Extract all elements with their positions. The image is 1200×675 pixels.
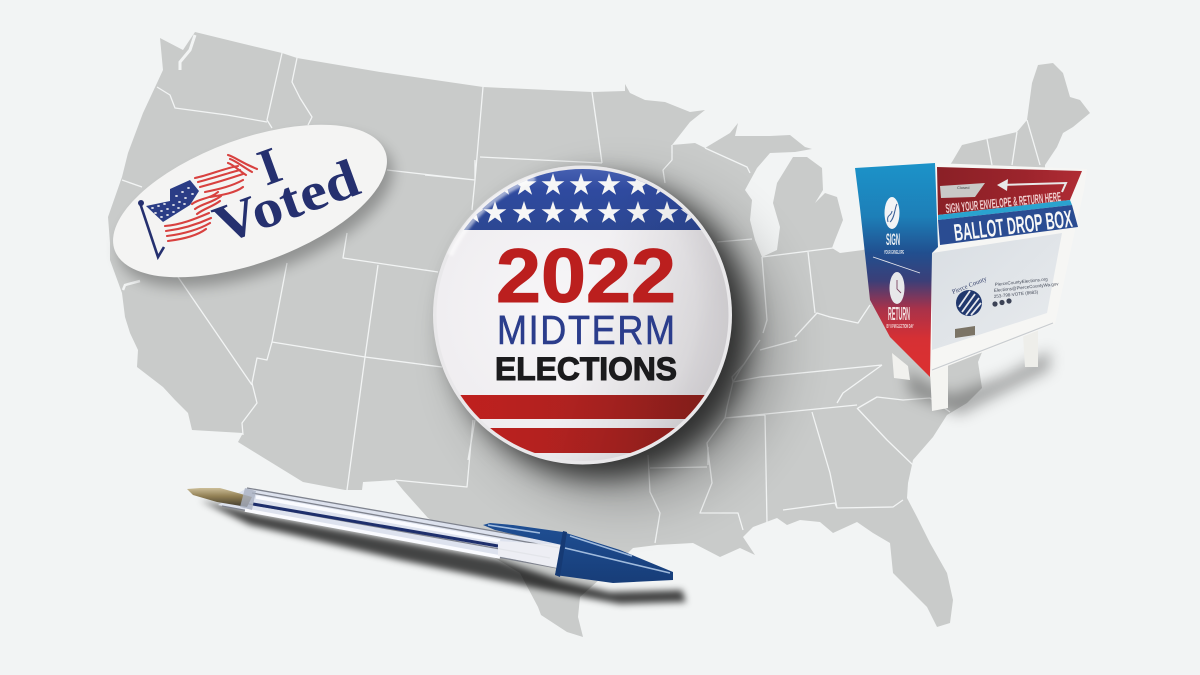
flag canton bbox=[146, 180, 199, 222]
contact text: PierceCountyElections.org bbox=[995, 276, 1048, 287]
red stripes bbox=[460, 395, 704, 453]
brass tip bbox=[187, 488, 252, 507]
campaign button: 2022 Midterm Elections bbox=[430, 165, 735, 464]
sticker text: Voted: Voted bbox=[206, 148, 367, 255]
pen barrel bbox=[218, 488, 562, 568]
blue star band bbox=[464, 169, 702, 230]
map: contiguous United States bbox=[108, 32, 1090, 637]
button shadow bbox=[450, 178, 772, 495]
pen shadow bbox=[200, 500, 686, 604]
button shading bbox=[436, 169, 728, 461]
ballpoint pen bbox=[187, 488, 673, 583]
sticker text: I: I bbox=[251, 137, 289, 197]
arrow toward slot bbox=[997, 179, 1066, 192]
rear left leg bbox=[892, 353, 910, 380]
county logo: Pierce County bbox=[951, 275, 989, 296]
sticker: I Voted bbox=[93, 93, 407, 309]
ballot drop box: YOUR ENVELOPE bbox=[884, 250, 904, 256]
front panel bbox=[932, 233, 1062, 350]
ballot drop box: SIGN YOUR ENVELOPE & RETURN HERE bbox=[945, 189, 1062, 216]
word: ELECTIONS: ELECTIONS bbox=[495, 351, 677, 387]
social icons bbox=[992, 298, 1012, 307]
front leg bbox=[930, 365, 948, 411]
sticker shadow bbox=[99, 103, 413, 319]
contact text: 253-798-VOTE (8683) bbox=[994, 289, 1039, 299]
ballot drop box bbox=[855, 163, 1087, 411]
ballot drop box: SIGN bbox=[886, 230, 900, 249]
barrel white highlight bbox=[245, 497, 500, 557]
side divider bbox=[873, 257, 920, 273]
front lower edge shade bbox=[932, 323, 1053, 370]
blue label band bbox=[938, 205, 1078, 245]
button rim bbox=[433, 166, 732, 464]
side: clock icon bbox=[890, 272, 904, 304]
rear right leg bbox=[1023, 330, 1038, 367]
cap highlights bbox=[488, 525, 670, 573]
drop slot bbox=[940, 183, 985, 198]
map: San Francisco bay bbox=[123, 281, 140, 290]
empty barrel end bbox=[498, 541, 562, 568]
county logo bbox=[951, 275, 989, 316]
contact text: Elections@PierceCountyWa.gov bbox=[994, 281, 1059, 293]
side panel gradient bbox=[855, 163, 938, 377]
box white frame bbox=[930, 163, 1087, 377]
map: Puget Sound inlet bbox=[180, 35, 195, 70]
flag icon bbox=[138, 155, 257, 257]
ballot drop box: BY 8 PM ELECTION DAY bbox=[886, 324, 914, 330]
side: sign icon bbox=[884, 197, 900, 229]
flag pole bbox=[140, 203, 164, 257]
barrel collar bbox=[240, 488, 256, 510]
cyan stripe bbox=[938, 200, 1072, 220]
button face bbox=[436, 169, 728, 461]
front red header bbox=[937, 167, 1082, 215]
map landmass bbox=[108, 32, 1090, 637]
map: state borders bbox=[122, 53, 1040, 543]
sticker body bbox=[93, 93, 407, 309]
pen cap bbox=[483, 523, 673, 583]
slot label: Closed bbox=[957, 185, 969, 190]
flag stripes bbox=[165, 155, 257, 241]
ballot box shadow bbox=[905, 350, 1050, 415]
ink tube bbox=[253, 504, 498, 546]
contact text bbox=[994, 276, 1059, 299]
year: 2022: 2022 bbox=[496, 234, 676, 319]
cap collar bbox=[555, 531, 567, 577]
word: MIDTERM: MIDTERM bbox=[497, 308, 675, 353]
pen barrel edges bbox=[222, 488, 562, 568]
button gloss bbox=[450, 178, 535, 255]
ballot drop box: RETURN bbox=[888, 304, 910, 324]
label text: BALLOT DROP BOX: BALLOT DROP BOX bbox=[952, 206, 1074, 247]
metal plate bbox=[955, 326, 975, 338]
